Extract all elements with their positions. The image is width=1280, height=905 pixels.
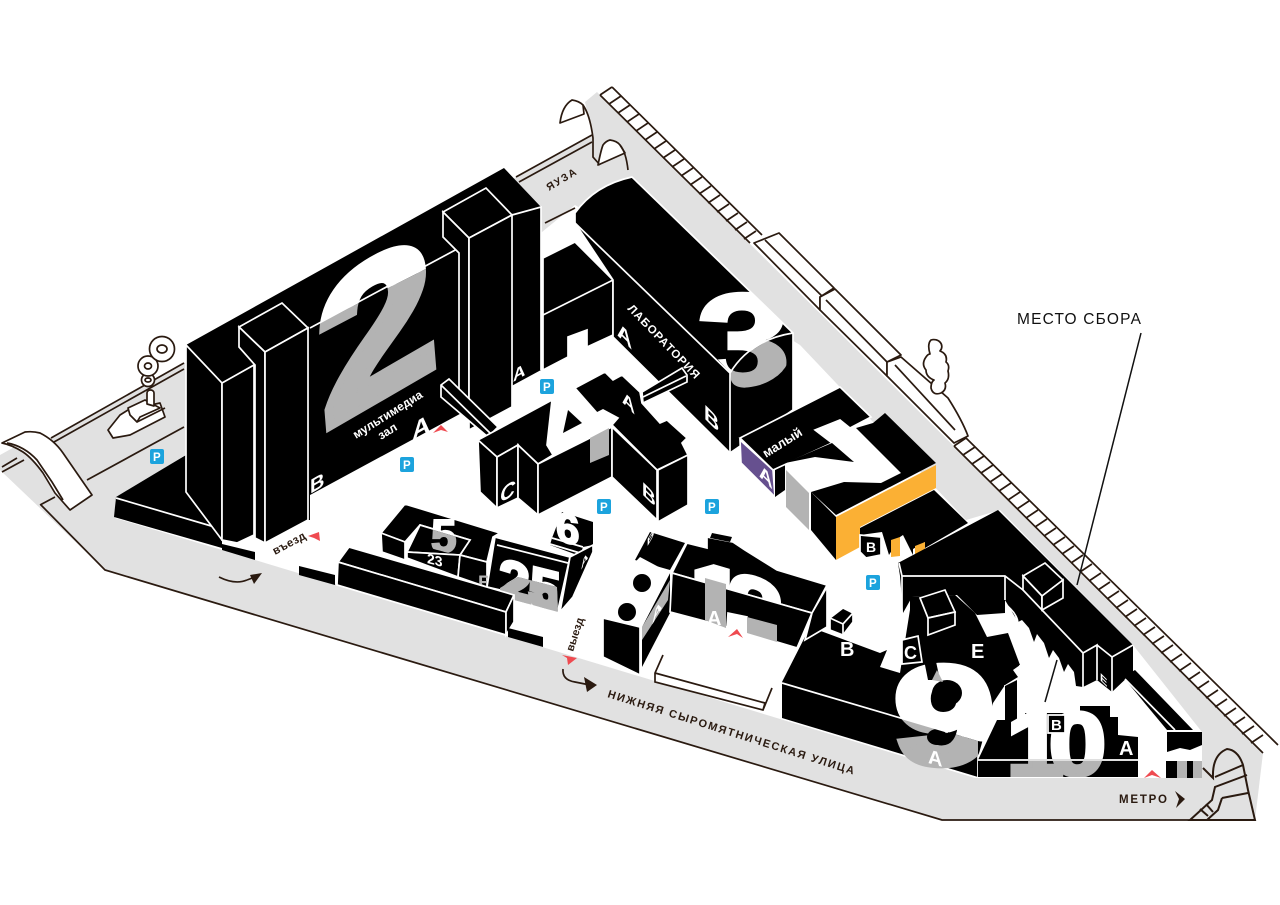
conveyor — [642, 368, 687, 403]
numeral 7: 7 — [853, 452, 866, 479]
numeral 10 lower: 10 — [1006, 693, 1106, 794]
building 9 — [782, 590, 1020, 792]
metro label: МЕТРО — [1119, 794, 1169, 806]
tower left — [186, 345, 222, 540]
long bar building — [299, 547, 543, 647]
wall divider — [310, 248, 459, 328]
annex of 7 — [860, 490, 968, 558]
building 3 laboratory: A — [617, 317, 632, 355]
building 10 — [978, 660, 1138, 777]
tower right — [443, 188, 512, 238]
building 5 — [382, 506, 498, 586]
numeral 3: 3 — [696, 267, 790, 417]
building 8: A — [652, 595, 662, 628]
numeral 2 lower: 2 — [309, 187, 443, 473]
building 8: B — [647, 526, 654, 550]
numeral 9 lower: 9 — [894, 638, 994, 792]
numeral 9: 9 — [894, 638, 994, 792]
icon: red entrance markers — [308, 425, 1161, 778]
leader line — [1077, 333, 1141, 585]
building 7: A — [759, 459, 773, 494]
train — [754, 233, 968, 443]
building 10: A — [1119, 738, 1133, 760]
building 5: 23 — [427, 551, 443, 571]
numeral 25 lower: 25 — [499, 548, 561, 625]
building 4: A — [622, 386, 635, 419]
building 9: E — [971, 641, 984, 663]
icon: train smoke — [924, 340, 949, 394]
icon: parking: P — [403, 460, 411, 472]
numeral 5 lower: 5 — [431, 510, 457, 562]
icon: boat — [108, 390, 165, 438]
building 11 — [1166, 732, 1202, 778]
building 2 — [114, 168, 541, 560]
icon: boat steam — [138, 336, 174, 386]
building 25: A — [581, 549, 588, 573]
ground: road and embankment — [0, 92, 1263, 820]
building 9: B — [840, 639, 854, 661]
building 12 — [669, 533, 826, 647]
numeral 25: 25 — [499, 548, 561, 625]
icon: top arches — [560, 100, 628, 170]
icon: parking: P — [600, 502, 608, 514]
icon: parking: P — [708, 502, 716, 514]
building D block — [898, 510, 1133, 692]
building 2: A — [412, 408, 430, 447]
building 4: B — [642, 477, 656, 512]
label: выезд: выезд — [564, 616, 587, 653]
river banks — [51, 135, 592, 480]
courtyard plaza — [115, 205, 1202, 778]
icon: parking: P — [543, 382, 551, 394]
building 2: зал — [375, 420, 400, 443]
street label: НИЖНЯЯ СЫРОМЯТНИЧЕСКАЯ УЛИЦА — [606, 688, 857, 778]
long wall — [186, 168, 541, 520]
building D block: D — [1005, 599, 1019, 635]
river label: ЯУЗА — [544, 166, 580, 194]
icon: bottom right arch — [1190, 749, 1255, 820]
icon: left bridge — [2, 432, 92, 510]
building 6 — [550, 503, 593, 556]
arrow: exit — [563, 669, 597, 692]
numeral 5: 5 — [431, 510, 457, 562]
strip — [222, 544, 255, 560]
building 9: C — [904, 643, 917, 663]
annex of 7: B — [866, 539, 876, 555]
icon: parking: P — [153, 452, 161, 464]
building 7 — [740, 387, 936, 560]
icon: metro arrow — [1175, 791, 1185, 808]
building 4 — [478, 368, 688, 522]
building 12: A — [707, 608, 721, 630]
base plate — [114, 455, 222, 548]
building 3 laboratory: B — [704, 400, 719, 438]
building 2: мультимедиа — [350, 387, 425, 442]
building 2: A — [513, 359, 525, 386]
strip buildings by 11 — [1123, 670, 1193, 730]
road edge — [41, 505, 1255, 820]
label: въезд: въезд — [271, 530, 309, 558]
building 9: A — [928, 746, 943, 772]
building 8: 8 — [620, 579, 628, 595]
numeral 12: 12 — [690, 539, 784, 672]
arrow: entry — [219, 573, 262, 584]
numeral 10: 10 — [1006, 693, 1106, 794]
building 5: B — [478, 573, 492, 594]
numeral 2: 2 — [309, 187, 443, 473]
numeral 4: 4 — [590, 412, 598, 428]
numeral 12 lower — [705, 578, 777, 642]
labels: B — [310, 467, 324, 499]
callout: meeting point: МЕСТО СБОРА — [1017, 311, 1142, 328]
railway — [600, 87, 1278, 753]
conveyor — [441, 379, 498, 437]
icon: parking — [150, 379, 880, 590]
building 8 — [603, 526, 685, 675]
court outline — [655, 655, 772, 710]
building 25 — [486, 538, 593, 612]
building 3 laboratory: ЛАБОРАТОРИЯ — [625, 303, 702, 382]
building 10: B — [1051, 717, 1062, 734]
icon: parking: P — [869, 578, 877, 590]
numeral 3 lower: 3 — [696, 267, 790, 417]
building 11: 11 — [1178, 751, 1187, 760]
building behind — [543, 242, 613, 370]
building D block: E — [1100, 670, 1107, 690]
building 4: C — [500, 474, 516, 508]
building 7: малый — [760, 424, 805, 461]
building 6: 6 — [556, 503, 579, 556]
tower middle — [239, 303, 308, 352]
building 3 laboratory — [575, 177, 793, 453]
